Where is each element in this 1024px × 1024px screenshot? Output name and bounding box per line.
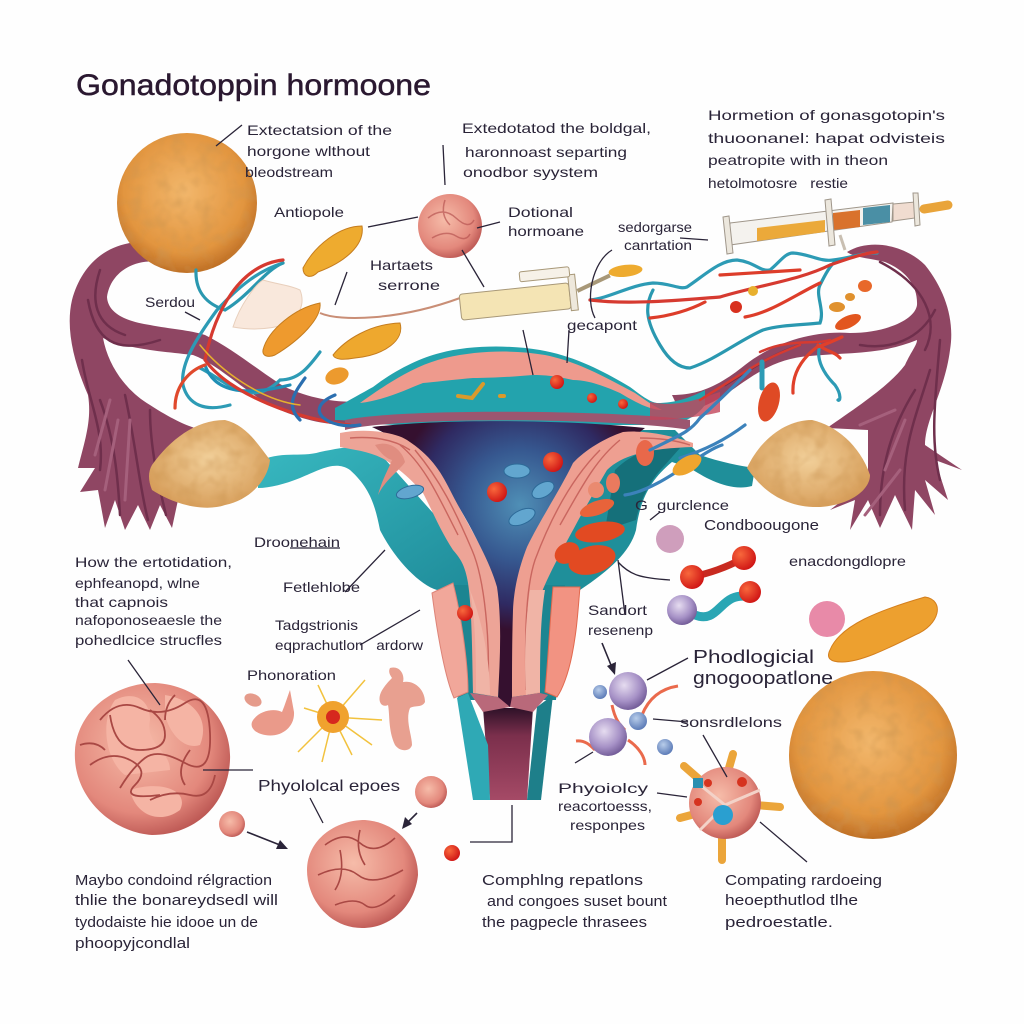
- right fallopian tube and fimbriae: [672, 245, 962, 530]
- arrow: to lower tissue from sphere: [247, 832, 288, 849]
- labels: right molecules: Condboougone: [704, 517, 819, 534]
- labels: lower left anatomy: eqprachutlon ardorw: [275, 637, 424, 653]
- labels: upper anatomy: [145, 204, 692, 333]
- text block: left description: that capnois: [75, 594, 168, 610]
- label: top centre callout: haronnoast separting: [465, 144, 627, 160]
- text block: bottom right: [725, 872, 882, 931]
- arrow: from top sphere: [402, 813, 417, 829]
- lower teal left: [457, 693, 490, 800]
- labels: upper anatomy: canrtation: [624, 237, 692, 253]
- leader lines and arrows: [128, 125, 807, 862]
- top right syringe: [723, 193, 948, 254]
- centre syringe: [457, 259, 646, 322]
- labels: right molecules: sonsrdlelons: [680, 714, 782, 730]
- labels: upper anatomy: Hartaets: [370, 257, 433, 273]
- label: physiological: Phyololcal epoes: [258, 778, 400, 795]
- label: phonoration: Phonoration: [247, 667, 336, 683]
- labels: right molecules: gnogoopatlone: [693, 668, 833, 688]
- small spheres lower centre: [219, 776, 460, 861]
- labels: upper anatomy: sedorgarse: [618, 219, 692, 235]
- left gland cells: [233, 226, 460, 388]
- label: top left callout: bleodstream: [245, 164, 333, 180]
- right ovary: [747, 420, 870, 507]
- dome lower rim: [345, 412, 690, 430]
- tube connector right: [650, 392, 720, 420]
- labels: lower left anatomy: [254, 534, 424, 653]
- left fold detail: [375, 444, 405, 495]
- cervix right fold: [545, 587, 580, 697]
- cervix left fold: [432, 583, 468, 698]
- text block: bottom left: [75, 872, 278, 952]
- large orange cell right: [789, 671, 957, 839]
- large orange cell top left: [117, 133, 257, 273]
- receptor cell: [680, 754, 780, 860]
- label: top right callout: peatropite with in theon: [708, 152, 888, 168]
- blood vessels right: [590, 252, 877, 495]
- left pink band: [340, 431, 500, 697]
- labels: upper anatomy: gecapont: [567, 317, 637, 333]
- left ovary: [149, 420, 270, 508]
- labels: right molecules: resenenp: [588, 622, 653, 638]
- labels: right molecules: [588, 497, 906, 730]
- label: top left callout: horgone wlthout: [247, 143, 370, 159]
- text block: bottom left: Maybo condoind rélgraction: [75, 872, 272, 889]
- labels: upper anatomy: serrone: [378, 277, 440, 293]
- labels: right molecules: Sandort: [588, 602, 647, 618]
- lower right molecules: [576, 672, 678, 765]
- label: top left callout: Extectatsion of the: [247, 122, 392, 138]
- labels: responses: Phyoiolcy: [558, 780, 648, 796]
- labels: lower left anatomy: Tadgstrionis: [275, 617, 358, 633]
- text block: bottom right: pedroestatle.: [725, 914, 833, 931]
- inner mauve funnel: [470, 693, 548, 712]
- left fallopian tube and fimbriae: [70, 243, 360, 530]
- labels: upper anatomy: Antiopole: [274, 204, 344, 220]
- labels: responses: reacortoesss,: [558, 798, 652, 814]
- label: top left callout: [245, 122, 392, 180]
- right pink band: [512, 432, 693, 697]
- cervix backing: [448, 585, 565, 700]
- red-orange cells in wall: [551, 440, 654, 580]
- arrow: to purple molecule: [602, 643, 616, 675]
- text block: left description: [75, 554, 232, 648]
- text block: bottom centre: [482, 872, 668, 931]
- small orange cells right: [669, 280, 872, 480]
- label: top right callout: Hormetion of gonasgotopin's: [708, 107, 945, 123]
- text block: left description: ephfeanopd, wlne: [75, 575, 200, 591]
- blood vessels left: [175, 260, 360, 426]
- labels: right molecules: Phodlogicial: [693, 647, 814, 667]
- labels: right molecules: G gurclence: [635, 497, 729, 513]
- brain-like tissue left: [75, 683, 230, 835]
- bottom pink tissue: [307, 820, 418, 928]
- blue cells in cavity: [395, 464, 557, 529]
- band striations: [350, 438, 690, 690]
- dome outline teal: [335, 347, 705, 425]
- labels: responses: [558, 780, 652, 833]
- centre inner folds: [470, 590, 545, 695]
- right teal body and tube: [530, 430, 755, 595]
- lower teal right: [527, 695, 553, 800]
- small pink cell top centre: [418, 194, 482, 258]
- labels: upper anatomy: Serdou: [145, 294, 195, 310]
- text block: left description: nafoponoseaesle the: [75, 612, 222, 628]
- label: top centre callout: [462, 120, 651, 180]
- labels: responses: responpes: [570, 817, 645, 833]
- uterus: [258, 347, 755, 800]
- red dots: [457, 375, 628, 621]
- yellow fragment on dome: [458, 384, 504, 398]
- text block: bottom centre: Comphlng repatlons: [482, 872, 643, 889]
- text block: left description: How the ertotidation,: [75, 554, 232, 570]
- right molecules: [656, 525, 937, 662]
- labels: right molecules: enacdongdlopre: [789, 553, 906, 569]
- label: top right callout: [708, 107, 945, 191]
- labels: upper anatomy: Dotional: [508, 204, 573, 220]
- cavity: [372, 421, 645, 707]
- labels: upper anatomy: hormoane: [508, 223, 584, 239]
- phonoration cell cluster: [242, 667, 425, 762]
- label: top centre callout: Extedotatod the boldgal,: [462, 120, 651, 136]
- label: top right callout: thuoonanel: hapat odvisteis: [708, 130, 945, 146]
- text block: bottom left: phoopyjcondlal: [75, 935, 190, 952]
- left teal body and tube: [258, 447, 475, 590]
- text block: left description: pohedlcice strucfles: [75, 632, 222, 648]
- text block: bottom left: thlie the bonareydsedl will: [75, 892, 278, 909]
- text block: bottom centre: the pagpecle thrasees: [482, 914, 647, 931]
- canal: [483, 708, 533, 800]
- title: Gonadotoppin hormoone: [76, 69, 431, 102]
- labels: lower left anatomy: Droonehain: [254, 534, 340, 550]
- label: top right callout: hetolmotosre restie: [708, 175, 848, 191]
- right body dark teal patch: [605, 447, 680, 530]
- text block: bottom left: tydodaiste hie idooe un de: [75, 914, 258, 931]
- labels: lower left anatomy: Fetlehlobe: [283, 579, 360, 595]
- text block: bottom centre: and congoes suset bount: [487, 893, 668, 910]
- text block: bottom right: Compating rardoeing: [725, 872, 882, 889]
- text block: bottom right: heoepthutlod tlhe: [725, 892, 858, 909]
- pink muscle band on dome: [360, 352, 662, 410]
- label: top centre callout: onodbor syystem: [463, 164, 598, 180]
